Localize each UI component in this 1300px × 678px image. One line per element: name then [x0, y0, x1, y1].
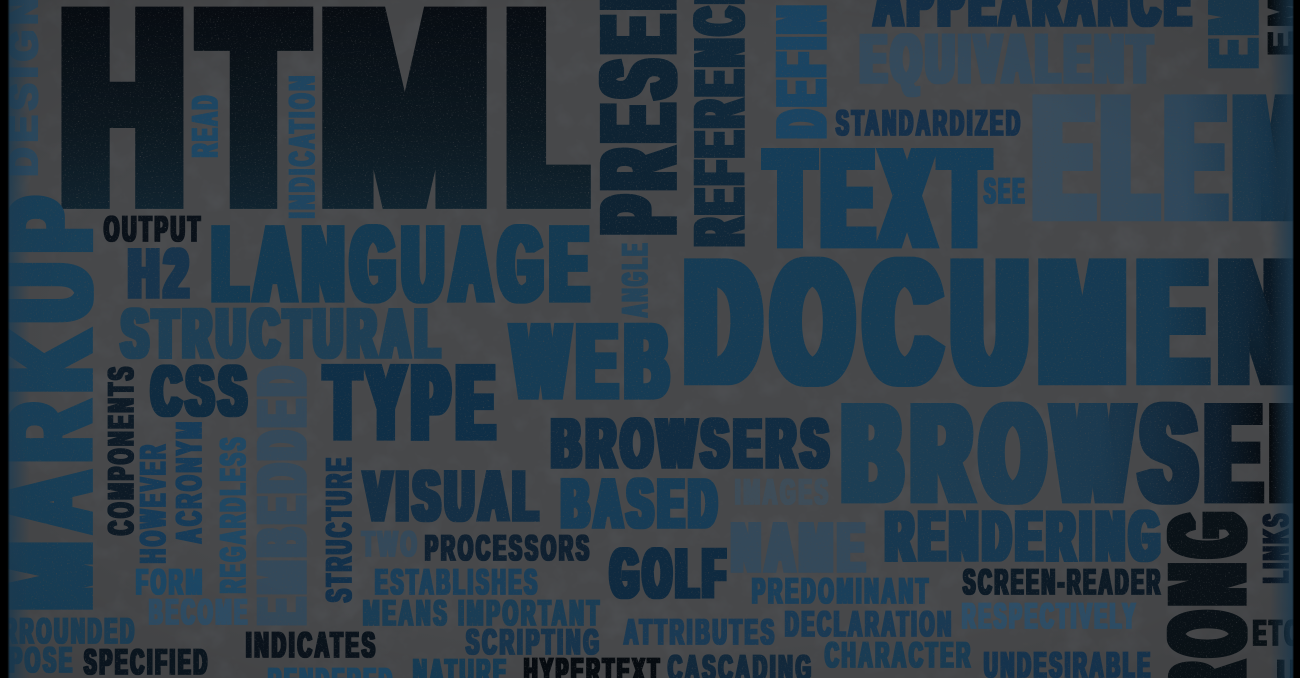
word: BASED: BASED	[562, 465, 722, 542]
word: INDICATES: INDICATES	[246, 626, 378, 665]
word: BECOME: BECOME	[149, 593, 250, 632]
word: HOWEVER: HOWEVER	[134, 442, 173, 563]
word: STRUCTURE: STRUCTURE	[320, 455, 359, 602]
word: PROCESSORS: PROCESSORS	[425, 529, 592, 568]
word: VISUAL: VISUAL	[365, 457, 543, 535]
word: LINKS: LINKS	[1257, 511, 1296, 583]
word: RESPECTIVELY: RESPECTIVELY	[962, 597, 1138, 636]
word: SCRIPTING: SCRIPTING	[466, 623, 602, 662]
word: ESTABLISHES: ESTABLISHES	[375, 563, 540, 602]
word: DECLARATION: DECLARATION	[785, 605, 954, 644]
word: TYPE: TYPE	[326, 345, 502, 461]
word: STRUCTURAL: STRUCTURAL	[122, 295, 445, 372]
word: STANDARDIZED: STANDARDIZED	[836, 104, 1023, 143]
word: MEANS IMPORTANT: MEANS IMPORTANT	[363, 594, 602, 633]
word: LANGUAGE: LANGUAGE	[213, 206, 596, 323]
word: GOLF: GOLF	[611, 535, 730, 612]
word: COMPONENTS: COMPONENTS	[102, 364, 141, 535]
word: REGARDLESS: REGARDLESS	[214, 435, 253, 593]
word cloud: SEE	[984, 172, 1027, 211]
word: BROWSERS: BROWSERS	[552, 405, 834, 482]
word: ANGLE: ANGLE	[616, 241, 655, 317]
word: TWO: TWO	[362, 525, 420, 564]
word: CHARACTER: CHARACTER	[825, 636, 973, 675]
word: EMBEDDED: EMBEDDED	[244, 362, 320, 624]
word: IMAGES: IMAGES	[735, 473, 831, 512]
word: WEB: WEB	[513, 304, 677, 420]
left edge vignette	[0, 0, 30, 678]
word: PREDOMINANT: PREDOMINANT	[752, 572, 931, 611]
word: OUTPUT: OUTPUT	[104, 210, 203, 249]
word: TEXT: TEXT	[768, 122, 998, 274]
word: CSS: CSS	[152, 352, 252, 430]
right edge vignette	[1270, 0, 1300, 678]
word: H2: H2	[129, 235, 194, 312]
word: FORM: FORM	[136, 563, 205, 602]
word: ACRONYM: ACRONYM	[170, 419, 209, 543]
word: READ: READ	[186, 93, 225, 157]
word: SURROUNDED: RROUNDED	[3, 612, 137, 651]
word: ATTRIBUTES: ATTRIBUTES	[624, 613, 777, 652]
word: NAME: NAME	[732, 509, 870, 586]
